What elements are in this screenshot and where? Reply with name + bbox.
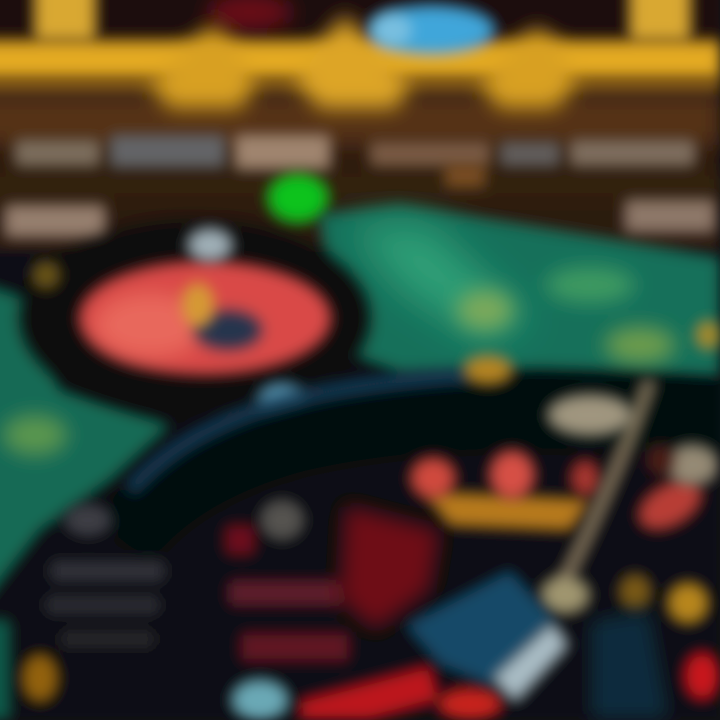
green marker <box>268 174 328 222</box>
chips and crown shape <box>411 451 720 700</box>
green table, left <box>0 280 170 720</box>
croupier hand and pale strokes <box>541 380 718 613</box>
lower red betting panel <box>225 505 502 720</box>
blue skylight <box>370 6 494 54</box>
green table, right <box>320 205 720 375</box>
blurred signage on the wall <box>5 135 715 237</box>
dark curved table edge <box>100 356 720 560</box>
blue card and white highlight <box>405 570 670 720</box>
lower dark panel with blurred text <box>22 500 304 702</box>
roulette wheel <box>19 220 371 420</box>
wheel outer black rim <box>19 220 371 416</box>
wheel hub colours <box>194 310 262 350</box>
gold columns and cornice <box>0 0 720 108</box>
wheel red ring <box>80 262 330 374</box>
back wall: casino upper gallery <box>0 0 720 250</box>
